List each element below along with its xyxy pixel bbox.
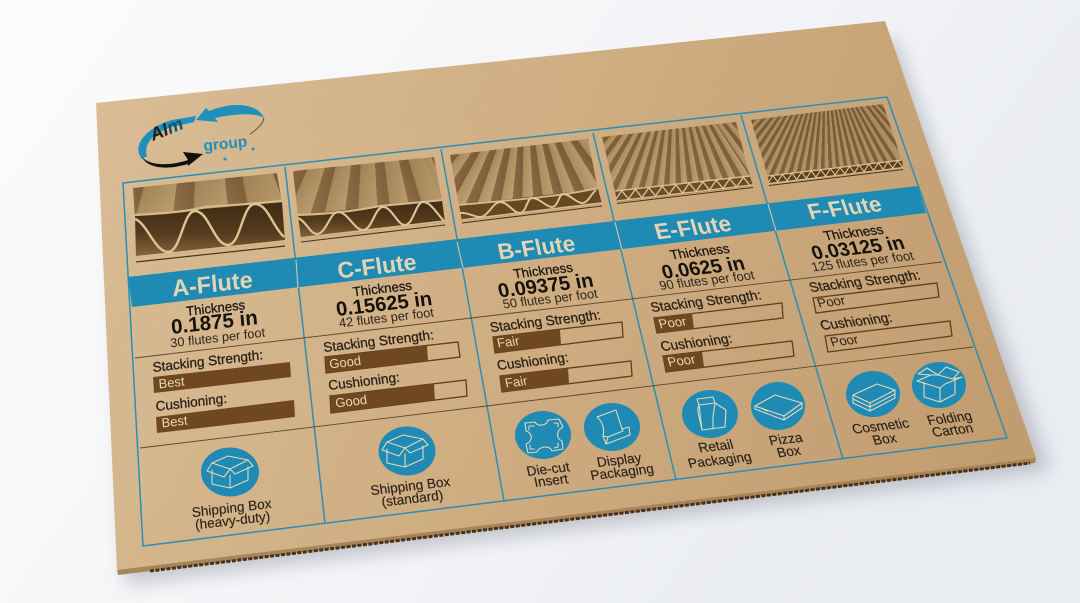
stacking strength E: Stacking Strength: bbox=[649, 288, 763, 315]
use: pizza box: Box bbox=[775, 443, 803, 460]
stacking strength C: Good bbox=[328, 353, 362, 371]
use: cosmetic box bbox=[846, 371, 911, 448]
specs F bbox=[808, 222, 916, 274]
heading A: A-Flute bbox=[171, 266, 254, 302]
table grid bbox=[123, 97, 1007, 546]
column: A-Flute bbox=[130, 170, 295, 532]
heading C: C-Flute bbox=[336, 249, 418, 283]
use: pizza box: Pizza bbox=[767, 430, 805, 448]
use: shipping box heavy-duty bbox=[191, 448, 272, 532]
specs C: Thickness bbox=[352, 278, 413, 299]
specs E bbox=[657, 241, 757, 293]
cushioning C bbox=[327, 370, 467, 413]
column: C-Flute bbox=[290, 155, 467, 510]
cushioning B bbox=[495, 350, 632, 392]
stacking strength C bbox=[322, 327, 460, 373]
use: retail packaging: Retail bbox=[696, 437, 735, 455]
use: display packaging: Packaging bbox=[589, 461, 655, 483]
specs F: 0.03125 in bbox=[808, 232, 908, 264]
use: pizza box bbox=[751, 382, 805, 460]
specs C: 42 flutes per foot bbox=[338, 305, 435, 330]
stacking strength E bbox=[649, 288, 783, 333]
specs B: 0.09375 in bbox=[496, 270, 596, 302]
flute illustration F bbox=[748, 102, 908, 186]
cushioning F bbox=[818, 310, 952, 352]
stacking strength B: Fair bbox=[495, 333, 522, 350]
board shadow bbox=[110, 40, 1050, 585]
specs B: Thickness bbox=[512, 260, 574, 281]
logo: AIm bbox=[146, 113, 186, 145]
specs E: 90 flutes per foot bbox=[657, 267, 757, 293]
cushioning E: Poor bbox=[666, 352, 698, 369]
stacking strength B: Stacking Strength: bbox=[488, 307, 602, 335]
flute illustration A bbox=[130, 170, 290, 262]
specs E: 0.0625 in bbox=[659, 253, 747, 284]
cushioning F: Cushioning: bbox=[818, 310, 894, 333]
specs F: Thickness bbox=[822, 222, 886, 243]
heading F: F-Flute bbox=[804, 192, 885, 224]
use: folding carton bbox=[912, 362, 975, 440]
specs A: Thickness bbox=[185, 297, 246, 319]
stacking strength A bbox=[152, 347, 291, 393]
use: shipping box heavy-duty: (heavy-duty) bbox=[194, 509, 271, 532]
cushioning F: Poor bbox=[828, 332, 861, 349]
column: B-Flute bbox=[448, 137, 655, 490]
cushioning B: Fair bbox=[503, 373, 530, 390]
specs F: 125 flutes per foot bbox=[809, 248, 916, 274]
cushioning E bbox=[659, 331, 794, 372]
stacking strength B bbox=[488, 307, 623, 353]
stacking strength F: Poor bbox=[815, 293, 848, 310]
use: die-cut insert: Die-cut bbox=[525, 459, 571, 479]
cushioning A bbox=[155, 391, 295, 433]
use: retail packaging bbox=[682, 390, 753, 471]
cushioning C: Good bbox=[334, 392, 368, 410]
use: shipping box heavy-duty: Shipping Box bbox=[191, 496, 272, 520]
use: shipping box standard: (standard) bbox=[380, 488, 444, 510]
use: shipping box standard bbox=[369, 426, 451, 510]
specs A: 0.1875 in bbox=[170, 306, 259, 339]
use: retail packaging: Packaging bbox=[686, 449, 753, 471]
column: E-Flute bbox=[600, 120, 805, 471]
flute illustration C bbox=[290, 155, 450, 242]
stacking strength E: Poor bbox=[657, 314, 689, 331]
stacking strength F bbox=[807, 268, 939, 313]
cushioning B: Cushioning: bbox=[495, 350, 570, 373]
cushioning A: Best bbox=[161, 413, 188, 430]
use: cosmetic box: Cosmetic bbox=[850, 416, 911, 437]
column: F-Flute bbox=[748, 102, 975, 448]
use: display packaging bbox=[584, 403, 655, 483]
use: cosmetic box: Box bbox=[870, 431, 899, 448]
specs A: 30 flutes per foot bbox=[170, 325, 266, 350]
specs A bbox=[170, 297, 266, 350]
specs C bbox=[335, 278, 435, 330]
logo bbox=[138, 105, 264, 168]
cushioning A: Cushioning: bbox=[155, 391, 228, 414]
stacking strength C: Stacking Strength: bbox=[322, 327, 435, 355]
cushioning C: Cushioning: bbox=[327, 370, 401, 393]
specs E: Thickness bbox=[668, 241, 732, 262]
use: shipping box standard: Shipping Box bbox=[369, 474, 451, 498]
heading E: E-Flute bbox=[651, 210, 734, 244]
logo: group bbox=[203, 133, 248, 155]
stacking strength F: Stacking Strength: bbox=[807, 268, 922, 295]
flute illustration E bbox=[600, 120, 755, 204]
specs B: 50 flutes per foot bbox=[501, 286, 599, 311]
stacking strength A: Stacking Strength: bbox=[152, 347, 264, 375]
use: die-cut insert bbox=[515, 411, 571, 490]
stacking strength A: Best bbox=[158, 374, 185, 391]
cushioning E: Cushioning: bbox=[659, 331, 734, 354]
use: display packaging: Display bbox=[595, 450, 643, 470]
flute illustration B bbox=[448, 137, 603, 223]
use: folding carton: Carton bbox=[930, 421, 975, 440]
specs B bbox=[496, 260, 599, 311]
specs C: 0.15625 in bbox=[335, 288, 434, 321]
heading B: B-Flute bbox=[495, 231, 578, 264]
use: folding carton: Folding bbox=[925, 408, 974, 428]
use: die-cut insert: Insert bbox=[533, 471, 570, 490]
